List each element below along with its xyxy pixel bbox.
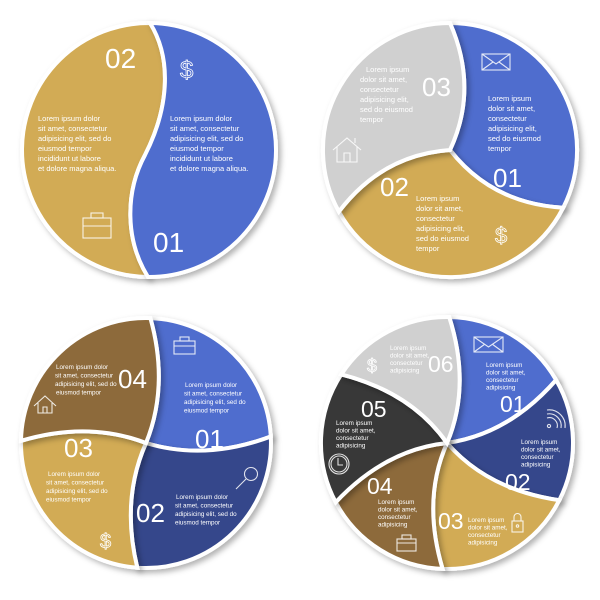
text block blue: adipisicing elit, sed do <box>170 134 243 143</box>
text block gray: tempor <box>360 115 384 124</box>
panel: circle 3 (four segments) <box>21 318 271 568</box>
text block brown: Lorem ipsum dolor <box>56 364 108 371</box>
text block gold: eiusmod tempor <box>46 496 91 504</box>
text block gray: dolor sit amet, <box>360 75 407 84</box>
number 03: 03 <box>438 508 464 534</box>
segment 05 dark <box>321 374 447 502</box>
text block blue: Lorem ipsum <box>488 94 531 103</box>
text block gold: Lorem ipsum dolor <box>38 114 101 123</box>
text block gold: adipisicing elit, <box>416 224 465 233</box>
text block blue: sit amet, consectetur <box>184 390 242 398</box>
text block dark: adipisicing <box>336 442 366 450</box>
text block dark: dolor sit amet, <box>336 428 376 434</box>
number 02: 02 <box>380 172 409 202</box>
icon: dollar: $ <box>495 223 507 248</box>
text block blue: sed do eiusmod <box>488 134 541 143</box>
text block gray: consectetur <box>360 85 399 94</box>
segment 01 blue <box>130 23 276 277</box>
text block blue: dolor sit amet, <box>488 104 535 113</box>
text block navy: Lorem ipsum dolor <box>176 494 228 501</box>
text block gold: dolor sit amet, <box>416 204 463 213</box>
text block navy: consectetur <box>521 454 554 461</box>
text block gold: tempor <box>416 244 440 253</box>
segment 01 blue <box>146 318 271 451</box>
text block gold: Lorem ipsum <box>416 194 459 203</box>
texts circle 4 <box>329 337 565 551</box>
text block dark: Lorem ipsum <box>336 420 372 427</box>
segment 02 gold <box>22 23 165 277</box>
number 03: 03 <box>422 72 451 102</box>
text block blue: dolor sit amet, <box>486 370 526 376</box>
text block blue: et dolore magna aliqua. <box>170 164 248 173</box>
text block blue: eiusmod tempor <box>184 408 229 414</box>
number 05: 05 <box>361 396 387 422</box>
text block brown: eiusmod tempor <box>56 390 101 396</box>
text block gold: sit amet, consectetur <box>46 480 104 486</box>
text block blue: adipisicing elit, <box>488 124 537 133</box>
number 01: 01 <box>153 227 184 258</box>
number 04: 04 <box>118 364 147 394</box>
number 06: 06 <box>428 351 454 377</box>
icon: briefcase <box>397 535 416 551</box>
icon: dollar: $ <box>367 356 377 376</box>
number 04: 04 <box>367 473 393 499</box>
text block gray: Lorem ipsum <box>366 65 409 74</box>
segment 03 gray <box>323 23 464 212</box>
text block gold: adipisicing <box>468 540 498 546</box>
texts circle 2 <box>333 54 541 253</box>
segment 01 blue <box>450 23 577 208</box>
icon: house <box>34 396 56 413</box>
text block dark: consectetur <box>336 435 369 442</box>
text block brown: sit amet, consectetur <box>55 372 113 380</box>
text block blue: incididunt ut labore <box>170 154 233 163</box>
text block gray: consectetur <box>390 360 423 367</box>
icon: house <box>333 138 361 162</box>
panel: circle 4 (six segments) <box>321 317 573 569</box>
text block brown: adipisicing elit, sed do <box>55 381 117 388</box>
text block brown: adipisicing <box>378 522 408 528</box>
text block blue: Lorem ipsum dolor <box>170 114 233 123</box>
segment 02 gold <box>339 150 563 277</box>
text block gold: eiusmod tempor <box>38 144 92 153</box>
icon: clock <box>329 454 349 474</box>
text block blue: Lorem ipsum <box>486 362 522 369</box>
segment 04 brown <box>21 318 159 443</box>
text block gray: adipisicing <box>390 368 420 374</box>
text block gold: Lorem ipsum dolor <box>48 471 100 478</box>
text block brown: consectetur <box>378 514 411 521</box>
text block brown: Lorem ipsum <box>378 499 414 506</box>
panel: circle 1 (two segments) <box>22 23 276 277</box>
icon: briefcase <box>83 213 111 238</box>
icon: magnifier <box>236 468 258 489</box>
texts circle 3 <box>34 337 258 553</box>
text block blue: eiusmod tempor <box>170 144 224 153</box>
segment 02 navy <box>447 380 573 500</box>
text block navy: adipisicing <box>521 462 551 468</box>
text block gray: dolor sit amet, <box>390 352 430 360</box>
number 02: 02 <box>136 498 165 528</box>
text block blue: adipisicing <box>486 384 516 392</box>
text block navy: eiusmod tempor <box>175 520 220 526</box>
text block blue: adipisicing elit, sed do <box>184 399 246 406</box>
text block navy: adipisicing elit, sed do <box>175 511 237 518</box>
text block brown: dolor sit amet, <box>378 506 418 514</box>
panel: circle 2 (three segments) <box>323 23 577 277</box>
text block blue: consectetur <box>488 114 527 123</box>
number 02: 02 <box>505 469 531 495</box>
text block gold: dolor sit amet, <box>468 524 508 532</box>
number 01: 01 <box>493 163 522 193</box>
number 03: 03 <box>64 433 93 463</box>
text block gold: incididunt ut labore <box>38 154 101 163</box>
text block navy: sit amet, consectetur <box>175 502 233 510</box>
text block gold: et dolore magna aliqua. <box>38 164 116 173</box>
icon: dollar: $ <box>100 531 111 553</box>
icon: briefcase <box>174 337 195 354</box>
segment 01 blue <box>447 317 556 443</box>
icon: envelope <box>474 337 503 352</box>
text block gray: sed do eiusmod <box>360 105 413 114</box>
text block blue: consectetur <box>486 377 519 384</box>
icon: dollar: $ <box>180 57 193 84</box>
text block gray: Lorem ipsum <box>390 345 426 352</box>
text block gold: sit amet, consectetur <box>38 124 108 133</box>
text block gray: adipisicing elit, <box>360 95 409 104</box>
icon: lock <box>512 514 523 532</box>
segment 03 gold <box>433 443 559 569</box>
segment 04 brown <box>336 443 447 569</box>
text block gold: consectetur <box>468 532 501 539</box>
segment 06 gray <box>341 317 460 443</box>
text block gold: sed do eiusmod <box>416 234 469 243</box>
text block blue: sit amet, consectetur <box>170 124 240 133</box>
text block gold: adipisicing elit, sed do <box>46 488 108 495</box>
text block gold: Lorem ipsum <box>468 517 504 524</box>
text block blue: tempor <box>488 144 512 153</box>
number 01: 01 <box>195 424 224 454</box>
icon: envelope <box>482 54 510 70</box>
number 01: 01 <box>500 391 526 417</box>
text block blue: Lorem ipsum dolor <box>185 382 237 389</box>
segment 02 navy <box>131 436 271 568</box>
icon: wifi <box>547 410 565 428</box>
text block gold: consectetur <box>416 214 455 223</box>
number 02: 02 <box>105 43 136 74</box>
segment 03 gold <box>21 431 146 568</box>
text block navy: dolor sit amet, <box>521 446 561 454</box>
text block gold: adipisicing elit, sed do <box>38 134 111 143</box>
text block navy: Lorem ipsum <box>521 439 557 446</box>
